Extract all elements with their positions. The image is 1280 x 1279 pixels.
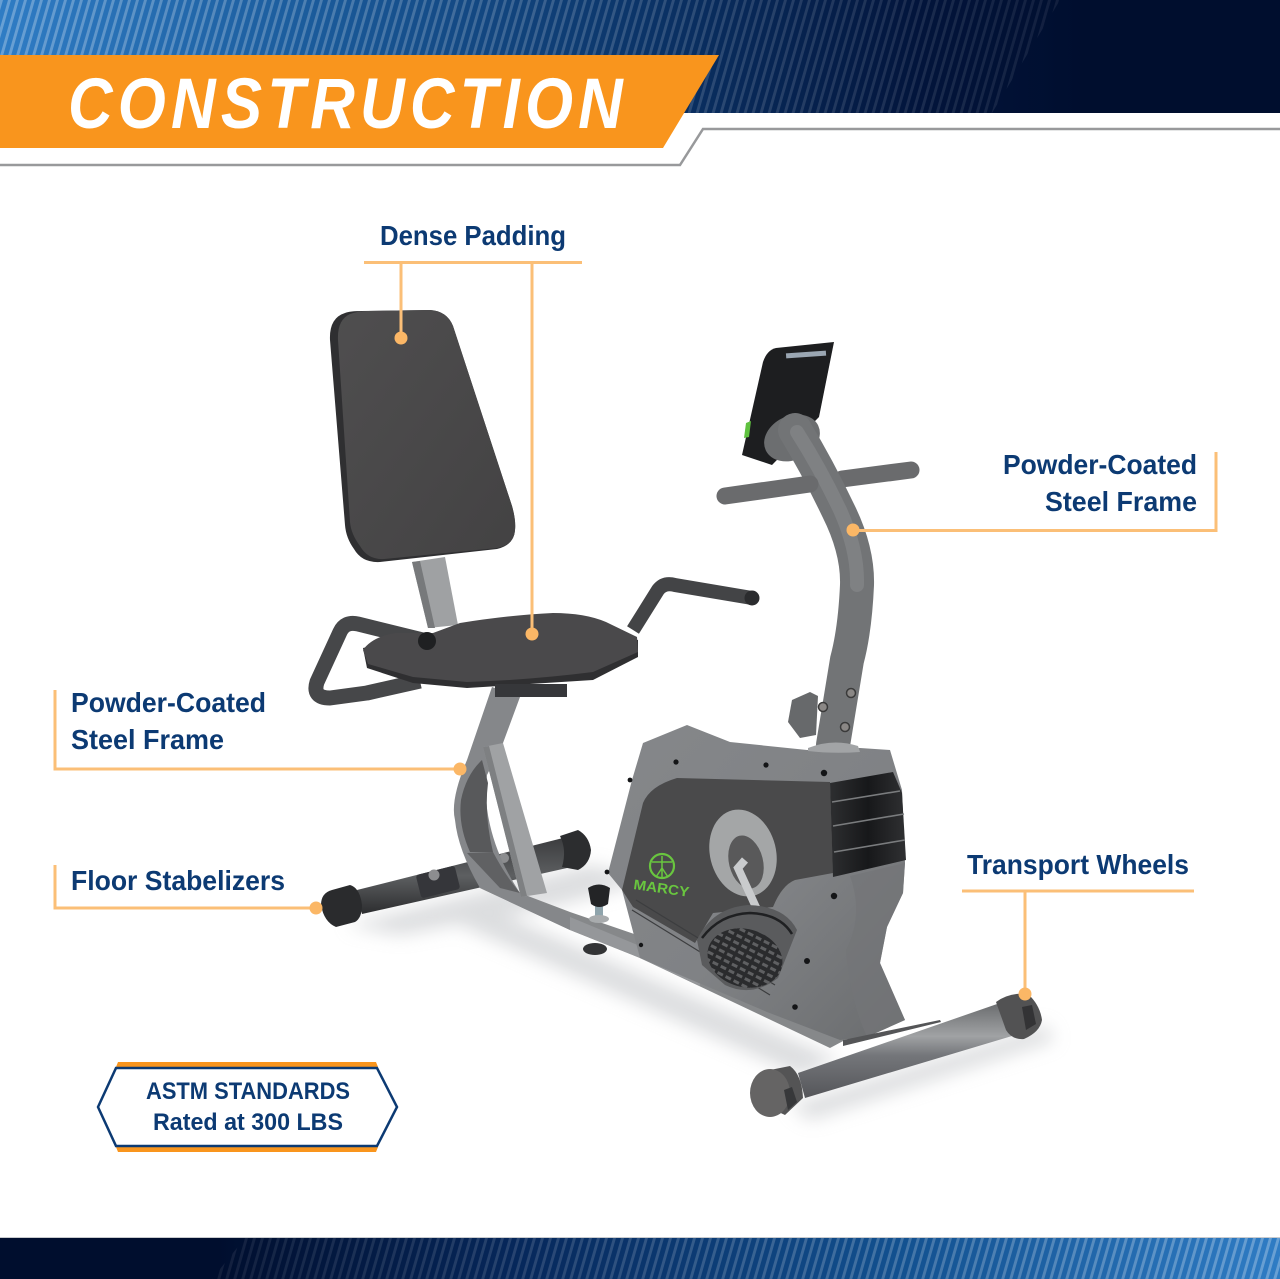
callout: transport wheels — [962, 849, 1194, 1000]
dark side panel — [622, 778, 833, 943]
logo — [633, 854, 691, 900]
header outline stroke — [0, 129, 1280, 165]
badge text: ASTM STANDARDS — [146, 1078, 350, 1105]
upright collar — [808, 742, 860, 753]
wheel right — [996, 994, 1042, 1039]
armrest knob — [418, 632, 436, 650]
label — [71, 687, 266, 755]
end cap left — [321, 885, 362, 927]
title ribbon — [0, 55, 719, 148]
label: Powder-Coated — [71, 687, 266, 718]
seat post — [412, 557, 458, 628]
label — [1003, 449, 1197, 517]
callout: powder-coated frame, right — [846, 449, 1216, 536]
label: Floor Stabelizers — [71, 865, 285, 896]
console — [742, 342, 834, 470]
label: Steel Frame — [71, 724, 224, 755]
lower neck shading — [846, 863, 905, 1037]
main beam — [480, 884, 845, 1048]
handlebar right — [842, 470, 911, 479]
seat frame and brace — [454, 687, 570, 930]
end cap right — [560, 830, 591, 870]
callout: floor stabilizers — [55, 865, 322, 914]
base stripes — [632, 900, 775, 995]
front stabilizer — [750, 994, 1042, 1117]
housing fasteners — [605, 759, 837, 1010]
console mount plate — [756, 406, 828, 470]
label: Transport Wheels — [967, 849, 1189, 880]
label: Dense Padding — [380, 220, 566, 251]
adjuster knob — [588, 884, 610, 923]
pedal — [697, 905, 797, 996]
logo: MARCY — [633, 876, 691, 900]
top banner: gradient with diagonal stripes — [0, 0, 1280, 113]
upright post — [788, 430, 857, 745]
badge text — [146, 1078, 350, 1136]
rear stabilizer — [321, 830, 591, 927]
badge text: Rated at 300 LBS — [153, 1109, 343, 1136]
diagonal brace — [483, 743, 547, 897]
wheel left — [750, 1066, 803, 1117]
black vent — [830, 772, 906, 877]
crank arm — [738, 860, 772, 942]
seat cushion — [363, 613, 638, 697]
callout: dense padding — [364, 220, 582, 640]
tension knob — [788, 692, 818, 738]
handlebar left — [725, 484, 810, 496]
rear handle right — [633, 584, 752, 630]
floor shadows — [345, 865, 1055, 1120]
backrest — [330, 310, 515, 562]
callout: powder-coated frame, left — [55, 687, 466, 776]
resistance housing — [605, 725, 906, 1040]
crank disc — [700, 802, 786, 904]
title: CONSTRUCTION — [68, 65, 628, 144]
rear handle left — [316, 623, 427, 698]
badge: ASTM standards — [98, 1062, 397, 1152]
label: Powder-Coated — [1003, 449, 1197, 480]
label: Steel Frame — [1045, 486, 1197, 517]
bike illustration — [316, 310, 1055, 1120]
bottom banner: gradient with diagonal stripes — [0, 1237, 1280, 1279]
upright bolts — [818, 688, 856, 732]
